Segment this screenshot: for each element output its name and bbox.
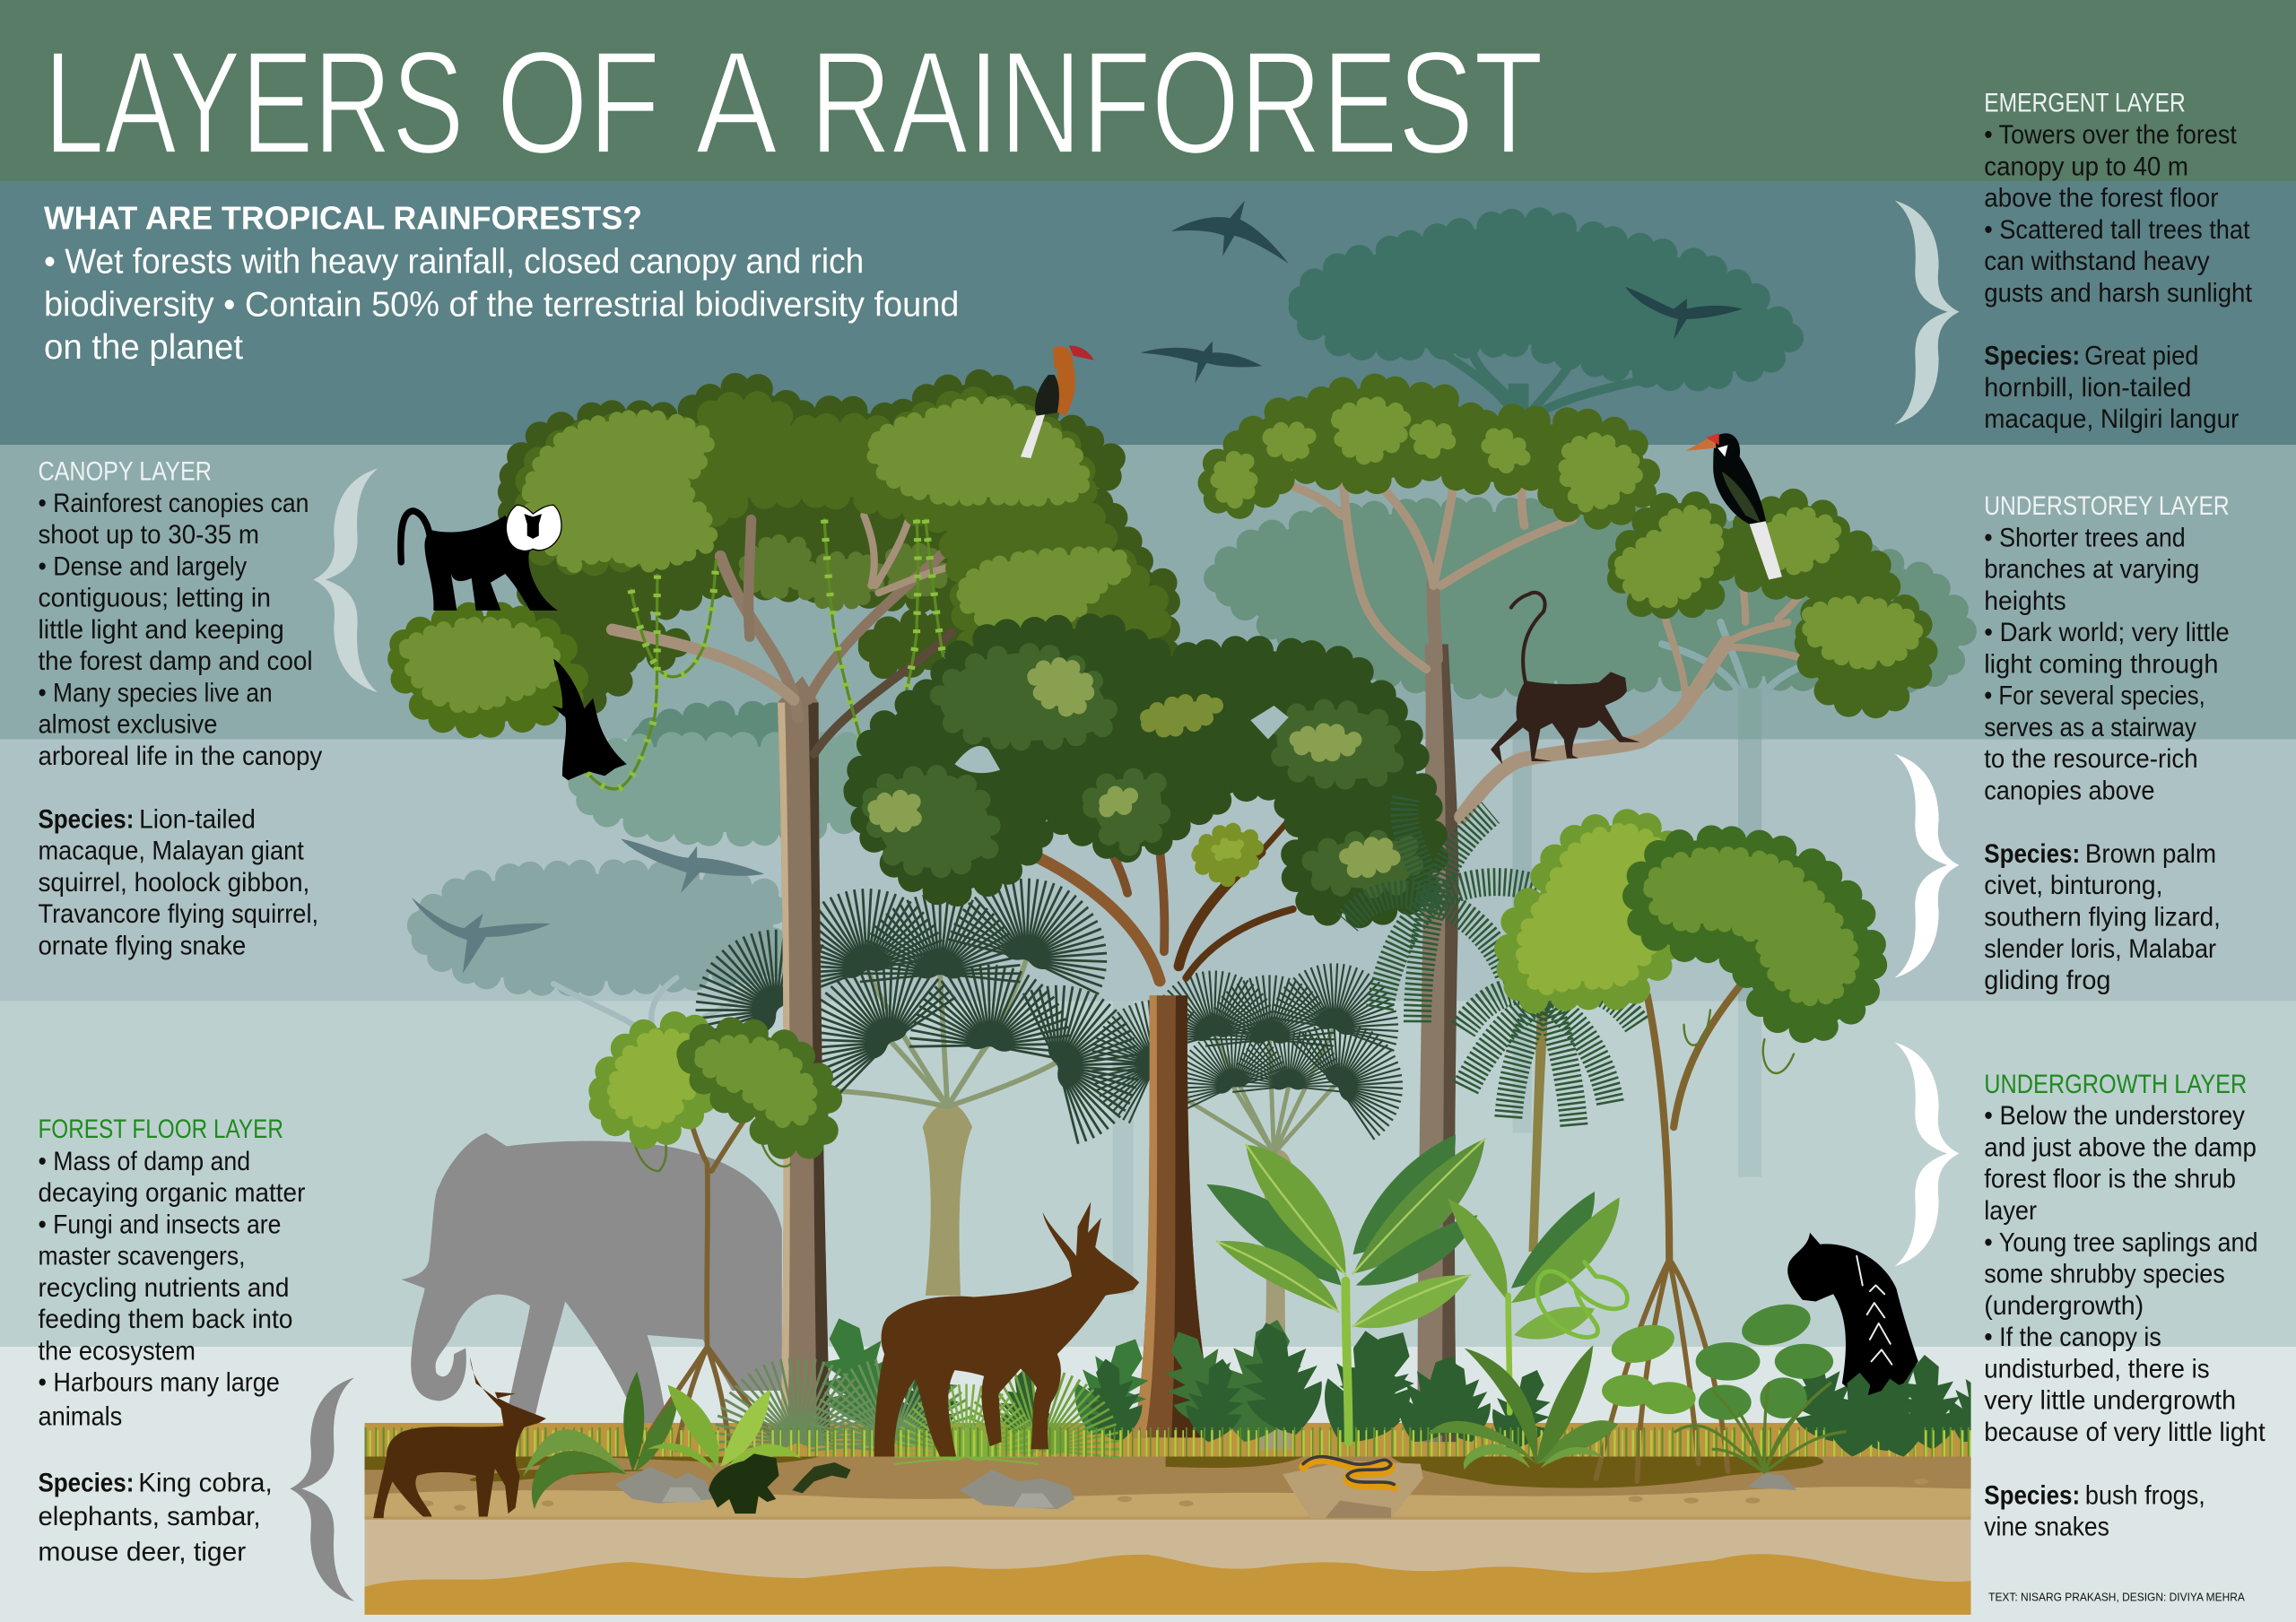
text: emergent layer: • Scattered tall trees that — [1984, 215, 2250, 245]
monstera leaves in front of tiger — [1824, 1370, 1929, 1462]
title: A — [696, 21, 778, 185]
brace: canopy layer — [313, 468, 378, 692]
animal: small dark lizard — [792, 1462, 851, 1493]
canopy mid — [529, 401, 1157, 644]
top crown light patches — [1218, 404, 1637, 505]
text: undergrowth layer: (undergrowth) — [1984, 1291, 2144, 1321]
rocks — [615, 1467, 1796, 1509]
bird 2 — [1141, 341, 1262, 384]
intro text block: on the planet — [44, 328, 243, 367]
text: forest floor layer: FOREST FLOOR LAYER — [38, 1115, 283, 1144]
ground plant: strap-leaved centre plant — [1428, 1345, 1618, 1470]
text: forest floor layer: King cobra, — [138, 1469, 273, 1498]
tufted palms and fern beside sambar — [714, 1357, 1120, 1464]
animal: tiger silhouette — [1787, 1233, 1918, 1398]
right crown: mid lobe — [1735, 503, 1841, 585]
text: emergent layer: • Towers over the forest — [1984, 120, 2237, 150]
text: undergrowth layer: some shrubby species — [1984, 1260, 2225, 1289]
text: canopy layer — [38, 457, 322, 961]
text: emergent layer: can withstand heavy — [1984, 247, 2210, 276]
animal: dark frog — [709, 1453, 779, 1514]
text: undergrowth layer: • Below the understorey — [1984, 1101, 2245, 1131]
text: canopy layer: • Many species live an — [38, 678, 273, 707]
animal: sambar deer — [874, 1201, 1139, 1456]
title: RAINFOREST — [810, 21, 1544, 185]
background silhouette: understorey trees — [422, 716, 864, 1042]
tree: large canopy tree with trunk and branches — [402, 384, 1166, 1442]
text: undergrowth layer: vine snakes — [1984, 1513, 2109, 1542]
right crown light patches — [1622, 513, 1916, 662]
text: understorey layer: heights — [1984, 586, 2066, 616]
hanging vines — [587, 520, 943, 789]
crown mid lobes — [872, 653, 1413, 889]
lower-left foliage — [402, 616, 574, 724]
text: understorey layer: UNDERSTOREY LAYER — [1984, 491, 2230, 521]
tree: tall emergent tree trunk and crowns — [1213, 388, 1923, 1442]
banana plant: small — [1448, 1192, 1620, 1413]
text: canopy layer: • Rainforest canopies can — [38, 489, 309, 518]
text: forest floor layer: feeding them back into — [38, 1305, 293, 1334]
small hanging foliage — [1199, 831, 1256, 879]
light lobes — [1509, 824, 1679, 1002]
ground dots — [419, 1479, 1928, 1511]
animal: lion-tailed macaque — [401, 505, 561, 611]
text: canopy layer: squirrel, hoolock gibbon, — [38, 868, 309, 898]
text: undergrowth layer: forest floor is the shrub — [1984, 1165, 2236, 1194]
text: canopy layer: Travancore flying squirrel, — [38, 899, 318, 929]
bird 3 — [1625, 287, 1743, 340]
text: undergrowth layer: bush frogs, — [2085, 1480, 2205, 1510]
ground plant: left fern — [523, 1372, 678, 1509]
tree: large dark central tree with brown trunk — [858, 629, 1434, 1437]
text: understorey layer: to the resource-rich — [1984, 744, 2198, 774]
bird 5 — [412, 898, 551, 974]
palm tree in centre-right — [1347, 798, 1537, 1025]
background silhouette: canopy layer tree — [1113, 512, 1962, 1294]
text: canopy layer: CANOPY LAYER — [38, 457, 212, 487]
brace: emergent layer — [1895, 201, 1959, 424]
text: understorey layer — [1984, 491, 2230, 995]
palm behind right tree — [1461, 986, 1637, 1252]
text: forest floor layer: the ecosystem — [38, 1336, 196, 1366]
trunk and branches — [1132, 995, 1222, 1437]
title: LAYERS — [44, 21, 465, 185]
brace: undergrowth layer — [1895, 1042, 1959, 1266]
text: forest floor layer: animals — [38, 1401, 122, 1431]
text: emergent layer: canopy up to 40 m — [1984, 152, 2188, 181]
branches — [1433, 581, 1437, 659]
text: emergent layer: macaque, Nilgiri langur — [1984, 404, 2239, 434]
text: undergrowth layer: very little undergrowth — [1984, 1386, 2236, 1416]
text: canopy layer: Species: — [38, 804, 134, 834]
right margin cover below the ground area — [1971, 1347, 2296, 1622]
text: undergrowth layer: • Young tree saplings and — [1984, 1227, 2258, 1257]
text: forest floor layer: mouse deer, tiger — [38, 1537, 247, 1566]
monstera shrub layer behind undergrowth — [803, 1305, 2023, 1465]
animal: brown monkey on branch — [1491, 593, 1640, 764]
sky gaps through crown — [954, 746, 1000, 773]
right crown: left lobe — [1622, 503, 1724, 604]
text: canopy layer: arboreal life in the canopy — [38, 742, 322, 771]
text: forest floor layer — [38, 1115, 306, 1566]
top crown dark — [1213, 388, 1646, 516]
brace: understorey layer — [1895, 754, 1959, 978]
text: forest floor layer: elephants, sambar, — [38, 1502, 261, 1531]
text: undergrowth layer: • If the canopy is — [1984, 1323, 2161, 1352]
text: emergent layer: hornbill, lion-tailed — [1984, 373, 2191, 403]
text: understorey layer: • Shorter trees and — [1984, 523, 2186, 552]
text: forest floor layer: decaying organic matter — [38, 1178, 306, 1208]
text: forest floor layer: recycling nutrients and — [38, 1273, 289, 1303]
small tree with prop roots, left — [603, 1026, 829, 1449]
text: forest floor layer: • Fungi and insects are — [38, 1210, 281, 1239]
text: emergent layer: Species: — [1984, 342, 2080, 371]
text: emergent layer: above the forest floor — [1984, 184, 2219, 213]
text: forest floor layer: master scavengers, — [38, 1242, 245, 1271]
text: understorey layer: gliding frog — [1984, 966, 2110, 995]
canopy dark base — [512, 384, 1166, 699]
text: understorey layer: • Dark world; very little — [1984, 618, 2230, 647]
grass strip — [365, 1442, 1971, 1444]
light patches — [530, 418, 709, 565]
text: undergrowth layer: because of very little light — [1984, 1418, 2266, 1447]
branches — [720, 556, 798, 717]
animal: great pied hornbill — [1685, 433, 1782, 580]
ground plant: yellow-green fern — [648, 1384, 801, 1471]
text: canopy layer: • Dense and largely — [38, 551, 247, 581]
text: understorey layer: canopies above — [1984, 776, 2154, 805]
background silhouette: emergent tree — [1303, 222, 1789, 445]
intro text block: WHAT ARE TROPICAL RAINFORESTS? — [44, 200, 642, 237]
text: canopy layer: contiguous; letting in — [38, 584, 271, 613]
title: OF — [496, 21, 660, 185]
round-leaved plant behind roots — [1602, 1319, 1696, 1414]
text: canopy layer: ornate flying snake — [38, 932, 246, 961]
birds in background — [412, 201, 1743, 974]
animal: hornbill on canopy — [1021, 345, 1094, 458]
intro text block: biodiversity • Contain 50% of the terrestrial biodiversity found — [44, 286, 959, 325]
text: undergrowth layer — [1984, 1070, 2266, 1542]
text: emergent layer — [1984, 89, 2252, 434]
text: emergent layer: EMERGENT LAYER — [1984, 89, 2186, 118]
ground plant: grass tuft — [1675, 1383, 1845, 1472]
right crown: big lobe — [1809, 542, 1923, 706]
text: understorey layer: light coming through — [1984, 649, 2218, 679]
tree on the right with prop roots — [1509, 824, 1873, 1481]
dark lobes — [1637, 840, 1873, 1028]
banana plant: large — [1206, 1134, 1485, 1442]
text: understorey layer: southern flying lizard, — [1984, 902, 2221, 932]
text: canopy layer: Lion-tailed — [139, 804, 256, 834]
round-leaved shrub — [1696, 1297, 1833, 1420]
text: undergrowth layer: Species: — [1984, 1480, 2080, 1510]
text: understorey layer: branches at varying — [1984, 555, 2199, 585]
text: understorey layer: Species: — [1984, 839, 2080, 869]
text: undergrowth layer: UNDERGROWTH LAYER — [1984, 1070, 2247, 1099]
bird 4 — [621, 839, 764, 893]
text: canopy layer: shoot up to 30-35 m — [38, 520, 259, 550]
text: understorey layer: civet, binturong, — [1984, 871, 2162, 900]
text: emergent layer: Great pied — [2084, 342, 2198, 371]
rock with orange snake — [1283, 1457, 1423, 1518]
trunk — [778, 676, 831, 1442]
vine snake — [1537, 1262, 1627, 1337]
text: understorey layer: serves as a stairway — [1984, 713, 2196, 742]
text: undergrowth layer: layer — [1984, 1196, 2037, 1226]
text: forest floor layer: • Mass of damp and — [38, 1147, 250, 1176]
bird 1 — [1171, 201, 1289, 264]
animal: mouse deer — [373, 1357, 546, 1518]
text: forest floor layer: • Harbours many large — [38, 1368, 280, 1398]
fan palm tree: right of big trunk — [1067, 949, 1429, 1449]
ground layers — [365, 1423, 1971, 1615]
animal: malayan giant squirrel — [552, 659, 627, 780]
trunk — [1417, 644, 1458, 1442]
text: emergent layer: gusts and harsh sunlight — [1984, 278, 2252, 308]
intro text block: • Wet forests with heavy rainfall, closed canopy and rich — [44, 242, 864, 281]
text: canopy layer: almost exclusive — [38, 710, 217, 740]
text: undergrowth layer: undisturbed, there is — [1984, 1354, 2210, 1383]
text: forest floor layer: Species: — [38, 1469, 134, 1498]
text: undergrowth layer: and just above the damp — [1984, 1132, 2257, 1162]
crown outer dark — [858, 629, 1434, 914]
brace: forest floor layer — [290, 1377, 354, 1601]
text: canopy layer: the forest damp and cool — [38, 646, 313, 676]
text: understorey layer: Brown palm — [2085, 839, 2216, 869]
text: understorey layer: • For several species, — [1984, 681, 2205, 711]
text: canopy layer: little light and keeping — [38, 615, 284, 645]
credit line: TEXT: NISARG PRAKASH, DESIGN: DIVIYA MEHRA — [1988, 1590, 2245, 1603]
elephant silhouette — [401, 1133, 782, 1442]
light leaf patches — [874, 665, 1396, 871]
inner leaf clusters — [746, 542, 944, 603]
text: canopy layer: macaque, Malayan giant — [38, 837, 304, 866]
fan palm tree: centre — [666, 855, 1162, 1296]
intro text block — [44, 200, 959, 367]
text: understorey layer: slender loris, Malabar — [1984, 934, 2216, 964]
